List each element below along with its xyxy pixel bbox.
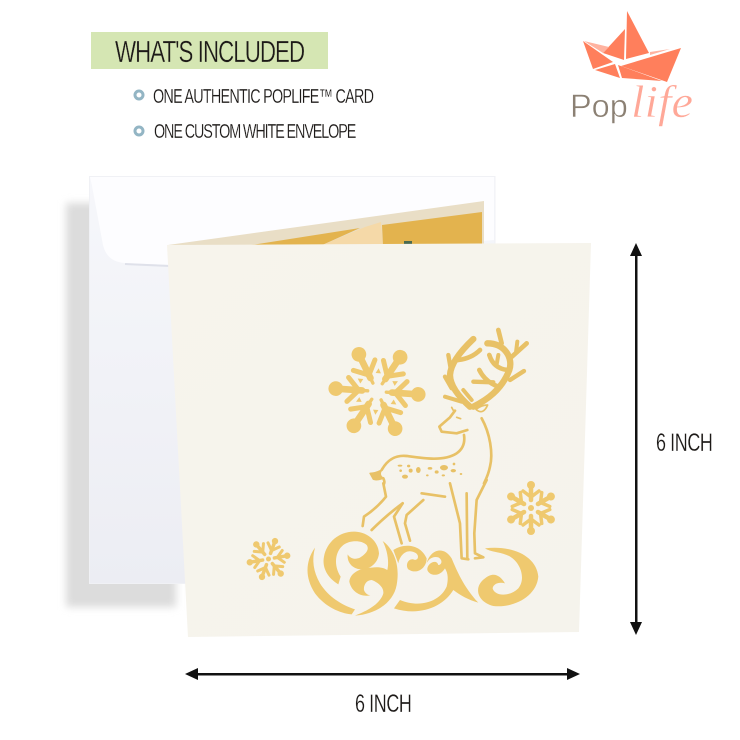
logo wordmark: life [631, 77, 693, 127]
stag legs [363, 480, 487, 559]
icon: origami boat [583, 11, 681, 82]
stag body [370, 405, 491, 484]
item: one authentic poplife card: ONE AUTHENTIC POPLIFE™ CARD [153, 85, 374, 108]
illustration: cloud swirls [307, 532, 538, 616]
left swirls [307, 532, 398, 616]
arrow: card width [185, 668, 580, 680]
illustration: stag [363, 330, 527, 559]
card interior peeking out [168, 201, 484, 246]
card front [167, 243, 591, 637]
envelope [66, 176, 495, 607]
illustration: small snowflake [246, 536, 291, 582]
item: one custom white envelope: ONE CUSTOM WHITE ENVELOPE [154, 120, 356, 143]
heading: what's included: WHAT'S INCLUDED [115, 34, 305, 69]
label: width 6 inch: 6 INCH [355, 689, 412, 718]
logo: poplife [570, 11, 693, 127]
list: included items [135, 85, 374, 143]
logo wordmark [570, 77, 693, 127]
middle and right swirls [393, 546, 538, 611]
logo wordmark: Pop [570, 88, 628, 124]
illustration: right snowflake [504, 481, 558, 535]
illustration: large snowflake [328, 342, 426, 441]
stag antlers [445, 330, 527, 407]
label: height 6 inch: 6 INCH [656, 428, 713, 457]
arrow: card height [630, 243, 642, 635]
